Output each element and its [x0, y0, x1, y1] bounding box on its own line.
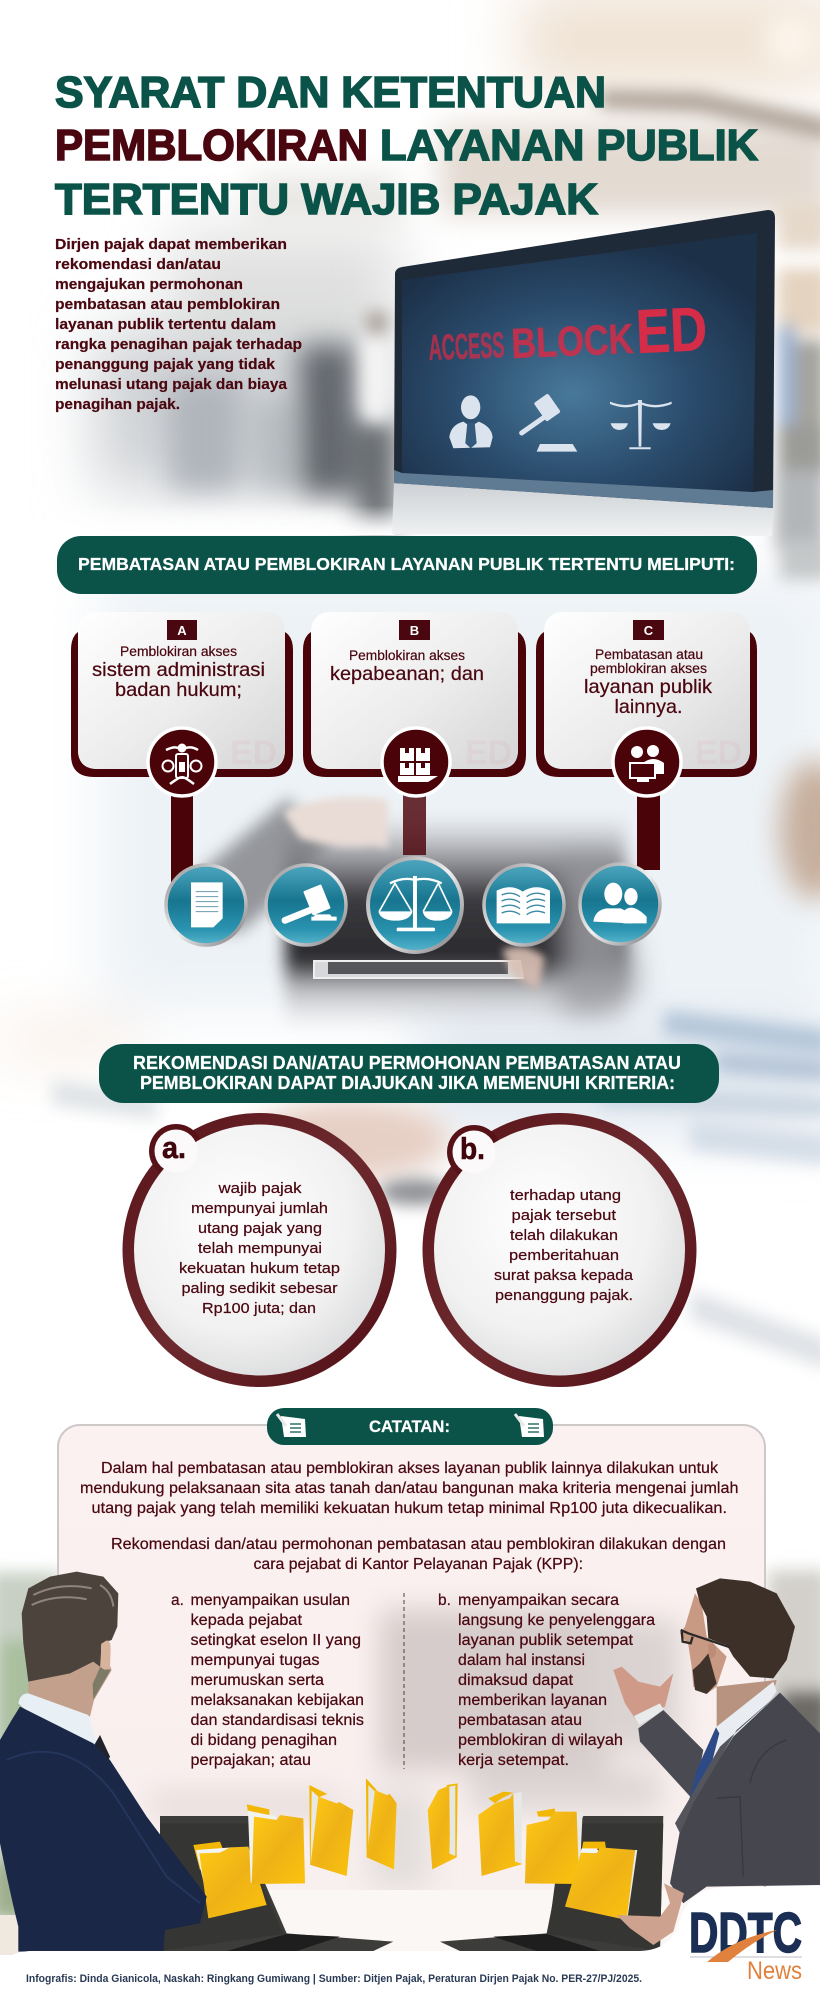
panel: criterion a: kekuatan hukum tetap — [179, 1260, 340, 1277]
list a: mempunyai tugas — [190, 1652, 320, 1669]
panel: criterion b: terhadap utang — [510, 1187, 621, 1204]
illustration: man on the left — [0, 1572, 207, 1952]
folder 6 — [478, 1792, 523, 1876]
icon: open book — [484, 865, 564, 945]
note paragraph — [80, 1460, 738, 1573]
folder 8 — [565, 1842, 637, 1920]
badge A — [167, 620, 197, 640]
icon row: legal symbols — [166, 858, 660, 952]
panel: card B — [303, 612, 526, 777]
photo: businessman with tablet — [200, 797, 640, 1030]
title: TERTENTU WAJIB PAJAK — [55, 175, 598, 224]
panel: card C: lainnya. — [614, 696, 682, 718]
list b — [438, 1592, 655, 1769]
note paragraph: Dalam hal pembatasan atau pemblokiran akses layanan publik lainnya dilakukan untuk — [101, 1460, 718, 1477]
panel: card C: pemblokiran akses — [590, 661, 707, 676]
icon: document — [166, 865, 246, 945]
panel: catatan — [58, 1425, 765, 1985]
folder 4 — [366, 1778, 397, 1869]
photo: monitor showing access blocked — [392, 210, 775, 536]
list a — [171, 1592, 364, 1769]
list b: memberikan layanan — [458, 1692, 607, 1709]
title: SYARAT DAN KETENTUAN — [55, 68, 606, 117]
panel: criterion a: utang pajak yang — [198, 1220, 322, 1237]
panel: card A: Pemblokiran akses — [120, 644, 237, 659]
connectors from cards to icon row — [171, 790, 660, 885]
panel: criterion a: a. — [162, 1130, 186, 1165]
section heading: kriteria: REKOMENDASI DAN/ATAU PERMOHONAN PEMBATASAN ATAU — [133, 1053, 681, 1073]
list a: dan standardisasi teknis — [190, 1712, 364, 1729]
panel: criterion b: pemberitahuan — [509, 1247, 619, 1264]
icons on the monitor: man, gavel, scales — [449, 393, 672, 452]
on-screen text: access blocked — [428, 295, 709, 368]
badge A: A — [177, 623, 187, 638]
list b: pembatasan atau — [458, 1712, 582, 1729]
list b: b. — [438, 1592, 451, 1609]
panel: criterion b: b. — [460, 1131, 485, 1166]
on-screen text: access blocked: ACCESS — [428, 324, 505, 368]
note paragraph: utang pajak yang telah memiliki kekuatan hukum tetap minimal Rp100 juta dikecualikan. — [92, 1500, 727, 1517]
folder 1 — [193, 1842, 267, 1918]
intro paragraph: layanan publik tertentu dalam — [55, 316, 276, 333]
panel: criterion a: mempunyai jumlah — [191, 1200, 328, 1217]
panel: criterion b: penanggung pajak. — [495, 1287, 633, 1304]
intro paragraph: mengajukan permohonan — [55, 276, 243, 293]
intro paragraph — [55, 236, 302, 413]
list a: di bidang penagihan — [190, 1732, 337, 1749]
list a: menyampaikan usulan — [190, 1592, 350, 1609]
panel: card B: Pemblokiran akses — [349, 648, 465, 663]
icon: people — [580, 864, 660, 944]
note paragraph: mendukung pelaksanaan sita atas tanah dan/atau bangunan maka kriteria mengenai jumlah — [80, 1480, 738, 1497]
intro paragraph: penanggung pajak yang tidak — [55, 356, 276, 373]
title: LAYANAN PUBLIK — [380, 121, 758, 170]
folder 2 — [247, 1804, 305, 1884]
section heading: layanan publik — [57, 536, 757, 594]
list a: perpajakan; atau — [190, 1752, 311, 1769]
panel: criterion a: wajib pajak — [217, 1180, 302, 1197]
panel: card C — [536, 612, 757, 777]
intro paragraph: Dirjen pajak dapat memberikan — [55, 236, 287, 253]
intro paragraph: melunasi utang pajak dan biaya — [55, 376, 288, 393]
panel: criterion a: paling sedikit sebesar — [182, 1280, 338, 1297]
panel: card A: ED — [230, 734, 277, 772]
panel: card B: ED — [465, 734, 512, 772]
panel: card A: sistem administrasi — [92, 659, 265, 681]
on-screen text: access blocked: BLOCK — [510, 315, 634, 367]
list b: dalam hal instansi — [458, 1652, 585, 1669]
panel: card C: ED — [695, 734, 742, 772]
list b: menyampaikan secara — [458, 1592, 619, 1609]
intro paragraph: penagihan pajak. — [55, 396, 180, 413]
footer credit: Infografis: Dinda Gianicola, Naskah: Ringkang Gumiwang | Sumber: Ditjen Pajak, Peraturan Dirjen Pajak No. PER-27/PJ/2025. — [26, 1973, 642, 1985]
panel: card A — [71, 612, 293, 777]
icon: scales of justice — [368, 858, 462, 952]
badge C: C — [644, 623, 654, 638]
panel: card B: kepabeanan; dan — [330, 663, 484, 685]
list b: kerja setempat. — [458, 1752, 569, 1769]
folder 5 — [428, 1783, 458, 1869]
panel: card C: Pembatasan atau — [595, 647, 703, 662]
illustration: flying folders — [193, 1778, 637, 1920]
badge C — [633, 620, 664, 640]
section heading: kriteria — [99, 1044, 719, 1103]
title — [55, 68, 758, 224]
list b: layanan publik setempat — [458, 1632, 634, 1649]
footer white band with logo tab — [0, 1887, 820, 2000]
note paragraph: Rekomendasi dan/atau permohonan pembatasan atau pemblokiran dilakukan dengan — [111, 1536, 726, 1553]
panel: criterion a: telah mempunyai — [198, 1240, 322, 1257]
list a: setingkat eselon II yang — [190, 1632, 361, 1649]
panel: criterion b: surat paksa kepada — [494, 1267, 634, 1284]
panel: criterion a — [122, 1113, 396, 1387]
icon: legal administration system — [148, 728, 216, 796]
intro paragraph: rangka penagihan pajak terhadap — [55, 336, 302, 353]
list a: merumuskan serta — [190, 1672, 324, 1689]
panel: criterion a: Rp100 juta; dan — [202, 1300, 316, 1317]
icon: gavel — [266, 865, 346, 945]
on-screen text: access blocked: ED — [635, 295, 709, 367]
icon: public service officer — [613, 728, 681, 796]
list a: melaksanakan kebijakan — [190, 1692, 364, 1709]
folder 3 — [309, 1785, 353, 1876]
illustration: man on the right — [613, 1578, 820, 1945]
intro paragraph: pembatasan atau pemblokiran — [55, 296, 280, 313]
badge B: B — [410, 623, 419, 638]
section heading: kriteria: PEMBLOKIRAN DAPAT DIAJUKAN JIKA MEMENUHI KRITERIA: — [140, 1073, 675, 1093]
note paragraph: cara pejabat di Kantor Pelayanan Pajak (KPP): — [254, 1556, 583, 1573]
panel: criterion b: pajak tersebut — [512, 1207, 617, 1224]
icon: customs cargo ship — [382, 728, 450, 796]
logo: DDTC News — [689, 1901, 802, 1985]
panel: card A: badan hukum; — [115, 679, 242, 701]
list b: dimaksud dapat — [458, 1672, 574, 1689]
catatan heading pill — [267, 1408, 553, 1445]
illustration: laptop right — [440, 1816, 663, 1951]
icon: note left — [277, 1414, 306, 1437]
folder 7 — [525, 1808, 583, 1884]
icon: note right — [515, 1414, 544, 1437]
list a: kepada pejabat — [190, 1612, 303, 1629]
section heading: layanan publik: PEMBATASAN ATAU PEMBLOKIRAN LAYANAN PUBLIK TERTENTU MELIPUTI: — [78, 554, 735, 574]
list b: pemblokiran di wilayah — [458, 1732, 623, 1749]
intro paragraph: rekomendasi dan/atau — [55, 256, 221, 273]
panel: criterion b — [422, 1113, 696, 1387]
logo: DDTC News: News — [747, 1957, 802, 1985]
list a: a. — [171, 1592, 184, 1609]
panel: card C: layanan publik — [584, 676, 712, 698]
catatan heading pill: CATATAN: — [369, 1417, 450, 1436]
illustration: laptop left — [160, 1816, 393, 1951]
title: PEMBLOKIRAN — [55, 121, 368, 170]
list b: langsung ke penyelenggara — [458, 1612, 655, 1629]
panel: criterion b: telah dilakukan — [510, 1227, 618, 1244]
badge B — [399, 620, 430, 640]
